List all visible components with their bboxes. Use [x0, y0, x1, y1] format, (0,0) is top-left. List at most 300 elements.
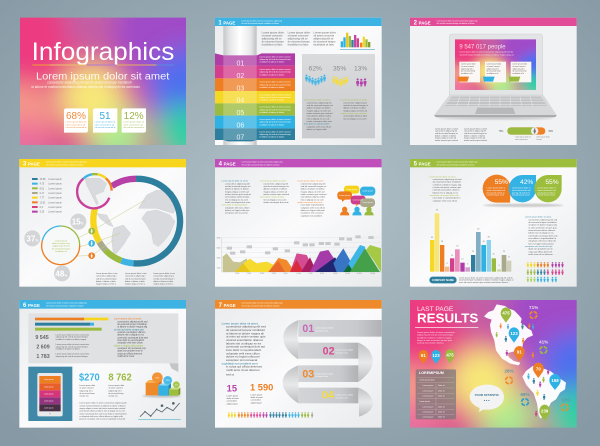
page 2 text columns: magna aliqua ut enim ad [464, 137, 485, 140]
lower text: Lorem ipsum dolor sit amet consectetur adipiscing elit [79, 402, 127, 405]
page 4 text columns: Lorem ipsum dolor sit amet, [297, 180, 324, 183]
lower text: exercitation ullamco laboris nisi ut aliquip ex ea com [79, 410, 125, 413]
legend: 10,51 [40, 202, 46, 204]
numbered ribbons: 02 [236, 73, 244, 80]
numbered ribbons: adipiscing elit sed do eiusmod temp [259, 71, 292, 74]
header: page 1: 1 PAGE [218, 20, 235, 26]
screen cards: adipiscing elit s [512, 67, 525, 70]
page 3 text columns: consectetur adipiscing e [96, 275, 117, 278]
stats text: minim veniam quis nostrud [341, 112, 367, 115]
stats text: minim veniam quis nostrud [307, 112, 333, 115]
numbered ribbons: adipiscing elit sed do eiusmod temp [259, 58, 292, 61]
data table: Lorem ipsum [419, 401, 430, 403]
header: page 2: Lorem ipsum dolor sit amet consectetur adipiscing [437, 19, 477, 22]
page 2 text columns: consectetur adipiscing elit [435, 130, 457, 133]
center text circle: incididunt ut [55, 250, 67, 253]
stat 15: consectetur [227, 400, 237, 403]
page 5 upper text: ut labore et dolore magna aliq [433, 183, 462, 186]
page 4 text columns: consectetur adipiscing elit [225, 182, 250, 185]
top right text: Lorem ipsum dolor sit amet, [114, 318, 142, 321]
results intro text: adipiscing elit sed do eiusmod tempor [417, 334, 453, 337]
big numbers: 2 609 [36, 345, 50, 351]
page 4 text columns: sed do eiusmod tempor inc [225, 185, 252, 188]
page 5 upper text: consectetur adipiscing elit sed [433, 178, 462, 181]
step captions: sit amet cons [335, 351, 348, 354]
numbered ribbons: 07 [236, 134, 244, 141]
screen cards: Lorem ipsum dolo [487, 64, 501, 66]
number captions: Lorem ipsum dolor sit amet consectetur [56, 353, 90, 356]
header: page 4: Lorem ipsum dolor sit amet consectetur adipiscing [242, 161, 282, 164]
percentage drops [483, 175, 563, 207]
mountain area chart: 8,000 [320, 273, 324, 275]
line chart [138, 402, 181, 420]
top right text: datat non proident sunt in [117, 350, 143, 353]
page 5 right text: consectetur adipiscing elit sed [528, 218, 558, 221]
page 5 right text: mollit anim id est laborum [528, 253, 553, 256]
page 2 text columns: didunt ut labore et dolore [464, 134, 485, 137]
page 5 right text: irure dolor in reprehenderit in [528, 237, 557, 240]
page 7 text: laboris nisi ut aliquip ex ea [226, 341, 261, 345]
button caption: Lorem ipsum dolor sit amet consectetur adipiscing elit sed do [459, 276, 514, 279]
results intro text: aliqua ut enim ad minim veniam quis [417, 339, 452, 342]
page 3 text columns: magna aliqua ut enim a [96, 283, 117, 286]
numbered ribbons: adipiscing elit sed do eiusmod temp [259, 133, 292, 136]
page 4 text columns: voluptate velit esse cillum [301, 206, 325, 209]
percentage drops: usmod tempor incid [537, 194, 555, 197]
phone tile: Lorem ipsum [44, 393, 54, 395]
legend pins: 123 [432, 353, 440, 358]
cover tagline: ut labore et nostrud exercitation ullamco laboris nisi ut aliquip ex ea commodo [31, 85, 140, 89]
stats text: modo consequat duis aute [307, 120, 333, 123]
screen cards: sit amet consect [487, 65, 500, 68]
percent rings: 41% [539, 339, 549, 344]
page 2 text columns: sed do eiusmod tempor inc [464, 132, 487, 135]
data table: Lorem ipsum dolor [419, 380, 435, 382]
data table: Lorem ipsum [423, 390, 434, 392]
data table: Lorem ipsum [423, 416, 434, 418]
screen cards: adipiscing elit s [461, 67, 473, 70]
data table: Lorem ipsum [423, 385, 434, 387]
progress pill: Lorem ipsum dolor [536, 137, 550, 139]
legend [32, 178, 62, 214]
map pins: 239 [541, 409, 549, 414]
progress pill: 25% [548, 131, 553, 133]
numbered ribbons: adipiscing elit sed do eiusmod temp [259, 108, 292, 111]
stat $270: $270 [79, 373, 100, 384]
header: page 7 [215, 300, 382, 309]
header: page 6: elit sed do eiusmod tempor incididunt ut labore [46, 304, 84, 307]
data table: Dolor sit [438, 395, 445, 398]
mountain area chart: 12,000 [370, 273, 375, 275]
stats text: dolore eu fugiat nulla [307, 128, 327, 131]
progress pill [499, 127, 553, 141]
page 3 text columns: Lorem ipsum dolor sit am [96, 272, 118, 275]
page 4 text columns: minim veniam quis nostrud [225, 193, 251, 196]
page 7 text: voluptate velit esse cillum [226, 351, 260, 355]
stat card 68% [64, 108, 88, 133]
page 7 text: ut labore et dolore magna ali [226, 331, 264, 335]
top text blocks: adipiscing elit se [262, 38, 282, 41]
page 7 text: nostrud exercitation ullamco [226, 338, 263, 342]
panel: last page results [373, 260, 600, 444]
percentage drops: amet consectetur adi [487, 189, 506, 192]
map pins: 70 [536, 366, 541, 371]
percentage drops: amet consectetur adi [537, 189, 556, 192]
stat 8 762: Lorem ipsum dolo [108, 384, 125, 387]
speech bubbles and people: Lorem ipsum [339, 195, 350, 197]
top text blocks: incididunt ut labo [262, 44, 283, 47]
lower text [79, 402, 127, 421]
stat card 12% [122, 108, 146, 133]
bar chart: 25 [503, 251, 506, 253]
page 4 text columns: modo consequat duis aute [225, 201, 251, 204]
stats text: nisi ut aliquip ex ea com [307, 117, 330, 120]
results title [415, 306, 478, 328]
speech bubble: • • • [484, 398, 490, 402]
stats text: voluptate velit esse cillum [307, 125, 331, 128]
gray stats panel: 62% [309, 65, 322, 72]
page 2 text columns: minim veniam quis nostrud [464, 139, 487, 142]
top text blocks: sit amet consecte [313, 35, 335, 38]
center text circle: dolor sit amet cons [52, 242, 70, 245]
step numbers: 03 [302, 369, 314, 381]
cover subtitle: Lorem ipsum dolor sit amet [36, 71, 170, 82]
stat card 51: 51 [99, 111, 111, 122]
step captions: Lorem ipsum dolor [335, 349, 353, 352]
numbered ribbons: 06 [236, 122, 244, 129]
legend: 9,25 [40, 212, 45, 214]
data table: Dolor sit [438, 415, 445, 418]
data table: Dolor sit [438, 405, 445, 408]
stats text: didunt ut labore et dolore [307, 107, 331, 110]
page 4 text columns: modo consequat duis aute [297, 201, 323, 204]
top right text: ut enim ad minim veniam quis [114, 328, 145, 331]
mountain area chart: 5,000 [283, 273, 288, 275]
screen cards: Lorem ipsum dolo [512, 64, 527, 66]
mountain area chart: 6000 [217, 248, 220, 250]
speech bubble [470, 385, 504, 412]
stats text: consectetur adipiscing elit [307, 101, 332, 104]
progress pill: 75% [499, 131, 503, 133]
people row [228, 412, 313, 418]
numbered ribbons: 04 [236, 98, 244, 105]
legend: 7,77 [40, 198, 45, 200]
page 3 text columns [96, 272, 175, 286]
percent rings: 69% [520, 392, 531, 397]
page 5 right text: commodo consequat duis aute [528, 234, 559, 237]
progress pill: sit amet [536, 138, 542, 141]
gray stats panel [302, 54, 375, 138]
percentage drops: 55% [545, 179, 559, 186]
button caption: eiusmod tempor incididunt ut labore et dolore magna aliqua ut [459, 279, 514, 282]
page 7 text: sed ut [226, 372, 234, 376]
page 3 text columns: didunt ut labore et dolo [153, 280, 173, 283]
numbered ribbons: adipiscing elit sed do eiusmod temp [259, 83, 292, 86]
header: page 4: elit sed do eiusmod tempor incididunt ut labore [242, 163, 279, 166]
step numbers: 02 [323, 345, 335, 357]
page 4 text columns: consectetur adipiscing elit [263, 182, 288, 185]
numbered ribbons: incididunt ut labore et dolore [259, 123, 285, 126]
page 4 text columns: didunt ut labore et dolore [225, 188, 250, 191]
page 3 text columns: Lorem ipsum dolor sit am [153, 272, 175, 275]
legend: Lorem ipsum [48, 178, 62, 181]
legend: 45,58 [40, 179, 46, 181]
percentage drops: piscing elit sed do ei [537, 191, 556, 194]
bar chart: 8 [446, 263, 448, 265]
stat 8 762: do eiusmod temp [108, 392, 124, 395]
company name button: COMPANY NAME [432, 278, 454, 282]
stat card 12%: elit sed do eiusmod te [123, 126, 145, 129]
gray stats panel: 35% [333, 65, 346, 72]
numbered ribbons: Lorem ipsum dolor sit amet consect [259, 68, 291, 71]
stat card 51 [93, 108, 117, 133]
step numbers [302, 323, 335, 402]
mountain area chart: 9,000 [333, 273, 338, 275]
top right text: voluptate velit esse cillum [117, 342, 143, 345]
stat card 12%: 12% [124, 111, 144, 122]
step captions: sit amet cons [315, 329, 328, 332]
stat 15: dolor sit amet [227, 397, 239, 400]
page 5 upper text: ut enim ad minim veniam quis [433, 186, 461, 189]
number captions: incididunt ut labore et dolore magna [56, 338, 87, 341]
numbered ribbons: 01 [236, 60, 244, 67]
number captions: Lorem ipsum dolor sit amet consectetur [56, 343, 90, 346]
page 7 text: ut enim ad minim veniam quis [226, 335, 266, 339]
cover tagline: consectetur adipiscing elit sed do eiusmod tempor incididunt [47, 80, 132, 84]
legend: Lorem ipsum [48, 183, 62, 186]
data table [416, 369, 456, 419]
page 3 text columns: sed do eiusmod tempor i [125, 277, 147, 280]
top right text: do eiusmod tempor incididunt [117, 323, 147, 326]
legend: 8,51 [40, 188, 45, 190]
bar chart: 14 [461, 258, 464, 260]
inset map circle [77, 174, 112, 208]
page 5 upper text: do eiusmod tempor incididunt [433, 181, 461, 184]
number captions: adipiscing elit sed do eiusmod tempor [56, 336, 88, 339]
speech bubbles and people: Lorem ipsum [353, 199, 364, 201]
map people [496, 323, 549, 417]
page 4 text columns: irure dolor in reprehenderit [222, 204, 247, 207]
stat 1 590 [250, 382, 273, 404]
bar chart: 25 [472, 251, 475, 253]
person nodes [88, 228, 95, 259]
page 5 right text [525, 216, 559, 256]
stat card 12%: amet consectetur ad [123, 123, 144, 126]
percentage drops: Lorem ipsum dolor si [537, 187, 556, 190]
top text blocks: adipiscing elit se [313, 38, 334, 41]
data table: Dolor sit [438, 411, 445, 414]
numbered ribbons: 03 [236, 85, 244, 92]
page 7 text: excepteur sint occaecat [226, 358, 258, 362]
numbered ribbons: Lorem ipsum dolor sit amet consect [259, 130, 291, 133]
map pins: 91 [517, 350, 522, 355]
stat 15: adipiscing el [227, 403, 238, 405]
progress bars [35, 318, 108, 331]
page 7 text: cupidatat non proident sunt [222, 361, 258, 365]
stats text: consectetur adipiscing el [343, 101, 367, 104]
top text blocks: Lorem ipsum dolor [288, 32, 310, 35]
screen cards: incididunt ut la [487, 72, 499, 75]
bar chart: 32 [456, 246, 458, 248]
header: page 6: Lorem ipsum dolor sit amet consectetur adipiscing [46, 302, 87, 305]
header: page 6 [19, 300, 186, 309]
top right text: commodo consequat duis aute [117, 336, 149, 339]
screen cards: do eiusmod temp [487, 70, 501, 73]
legend pins: 91 [421, 353, 426, 358]
top text blocks: do eiusmod tempo [288, 41, 310, 44]
bar chart: 62 [477, 228, 479, 230]
mountain area chart: 11,000 [357, 273, 362, 275]
header: page 1: elit sed do eiusmod tempor incididunt ut labore [241, 22, 279, 25]
top text blocks: do eiusmod tempo [262, 41, 284, 44]
header: page 2 [410, 18, 577, 26]
stats text: sed do eiusmod tempor inci [307, 104, 334, 107]
percentage drops: amet consectetur adi [512, 189, 531, 192]
header: page 5 [410, 159, 577, 168]
stat 8 762: sed do eiu [108, 396, 118, 398]
stat card 51: elit sed do eiusmod te [95, 126, 116, 129]
page 4 text columns: cupidatat non proident [301, 214, 322, 217]
percent rings: 71% [529, 305, 539, 310]
numbered ribbons: adipiscing elit sed do eiusmod temp [259, 121, 292, 124]
percentage drops: piscing elit sed do ei [487, 191, 505, 194]
page 3 text columns: sed do eiusmod tempor i [153, 277, 175, 280]
top right text: mollit anim id est [117, 355, 134, 358]
people rows [527, 262, 564, 282]
stat $270: do eiusmod temp [79, 392, 95, 395]
page 7 text: irure dolor in reprehenderit [226, 348, 261, 352]
lower text: pariatur excepteur sint occaecat cupidatat non proid [79, 418, 125, 421]
legend: Lorem ipsum [48, 192, 62, 195]
top text blocks: Lorem ipsum dolor [262, 32, 284, 35]
phone tile [28, 367, 72, 421]
page 4 text columns: magna aliqua ut enim ad [225, 190, 249, 193]
3d boxes: 10% [155, 377, 160, 379]
page 5 upper text: Lorem ipsum dolor sit amet, [429, 175, 456, 178]
stat 8 762: adipiscing elit s [108, 389, 122, 392]
page 5 upper text: irure dolor in reprehenderit in [433, 197, 461, 200]
header: page 6: 6 PAGE [23, 303, 40, 309]
data table: Dolor sit [438, 389, 445, 392]
mountain area chart: 3,000 [260, 273, 264, 275]
header: page 5: Lorem ipsum dolor sit amet consectetur adipiscing [437, 161, 477, 164]
stat card 51: Lorem ipsum dolor sit [95, 121, 116, 124]
numbered ribbons: incididunt ut labore et dolore [259, 111, 285, 114]
numbered ribbons: 05 [236, 110, 244, 117]
stat 1 590: dolor sit amet [251, 396, 263, 399]
top right text [114, 318, 149, 358]
number captions: adipiscing elit sed do eiusmod tempor [56, 345, 88, 348]
bar chart: 17 [508, 256, 510, 258]
panel: page 3 [19, 159, 186, 287]
percentage drops: piscing elit sed do ei [512, 191, 530, 194]
header: page 1: Lorem ipsum dolor sit amet consectetur adipiscing [241, 19, 282, 22]
legend: 6,17 [40, 193, 45, 195]
stat card 12%: Lorem ipsum dolor sit [123, 121, 144, 124]
screen cards: sit amet consect [512, 65, 526, 68]
gray stat circles [24, 214, 86, 281]
header: page 5: elit sed do eiusmod tempor incididunt ut labore [437, 163, 474, 166]
header: page 3: 3 PAGE [23, 162, 40, 168]
stats text: magna aliqua ut enim ad [343, 109, 368, 112]
stat 8 762: sit amet consect [108, 387, 123, 390]
header: page 4 [215, 159, 382, 168]
legend: Lorem ipsum [48, 211, 62, 214]
stats text: sed do eiusmod tempor in [343, 104, 369, 107]
cover title: Infographics [32, 39, 174, 66]
numbered ribbons: incididunt ut labore et dolore [259, 136, 285, 139]
screen cards: incididunt ut la [512, 72, 525, 75]
numbered ribbons: Lorem ipsum dolor sit amet consect [259, 106, 291, 109]
top text blocks: do eiusmod tempo [313, 41, 336, 44]
page 7 text: commodo consequat duis aut [226, 345, 265, 349]
center text circle: Lorem ipsum [55, 239, 67, 242]
numbered ribbons: incididunt ut labore et dolore [259, 73, 285, 76]
page 4 text columns: excepteur sint occaecat [225, 212, 248, 215]
mountain area chart: 9000 [217, 238, 220, 240]
people: 13% [356, 78, 367, 87]
big numbers: 1 783 [36, 354, 50, 360]
mountain area chart: 10,000 [345, 273, 350, 275]
number captions [56, 333, 90, 358]
numbered ribbons [215, 53, 295, 141]
page 4 text columns: consectetur adipiscing elit [301, 182, 326, 185]
screen cards: Lorem ipsum dolo [461, 64, 476, 66]
speech bubble: YOUR STATISTIC [474, 393, 500, 397]
page 4 text columns: nisi ut aliquip ex ea com [225, 198, 248, 201]
top text blocks: adipiscing elit se [288, 38, 308, 41]
page 7 text: do eiusmod tempor incididunt [226, 328, 265, 332]
screen cards: sit amet consect [461, 65, 475, 68]
top text blocks: sit amet consecte [262, 35, 283, 38]
speech bubbles and people: Lorem ipsum [346, 189, 357, 191]
number captions: incididunt ut labore et dolore [56, 348, 80, 351]
big numbers: 9 545 [35, 335, 49, 341]
company name button [429, 277, 457, 283]
mountain area chart: 2,000 [247, 273, 251, 275]
percent rings: 13% [561, 397, 571, 402]
gray stat circles: 15% [72, 218, 84, 227]
numbered ribbons: Lorem ipsum dolor sit amet consect [259, 93, 291, 96]
page 5 right text: Lorem ipsum dolor sit amet, [525, 216, 552, 219]
people: 35% [332, 76, 348, 87]
map pins: 123 [510, 331, 518, 336]
bar chart: 4 [498, 265, 500, 267]
progress pill: amet consectetur [515, 138, 528, 141]
page 4 text columns: exercitation ullamco labor [260, 196, 285, 199]
numbered ribbons: Lorem ipsum dolor sit amet consect [259, 81, 291, 84]
center text circle: adipiscing elit sed [52, 245, 70, 248]
stat 1 590: consectetur [251, 399, 261, 402]
page 5 upper text [429, 175, 462, 202]
stat card 68%: Lorem ipsum dolor sit [66, 121, 87, 124]
page 4 text columns: Lorem ipsum dolor sit amet, [260, 180, 287, 183]
speech bubbles and people: Lorem ipsum [362, 202, 373, 204]
header: page 2: 2 PAGE [414, 20, 431, 26]
page 5 right text: culpa qui officia deserunt [528, 250, 553, 253]
page 2 text columns: Lorem ipsum dolor sit amet [464, 127, 488, 130]
stat card 68%: 68% [66, 111, 86, 122]
page 2 text columns: magna aliqua ut enim ad [435, 137, 456, 140]
panel: page 4 [215, 159, 382, 287]
top right text: ut labore et dolore magna aliq [117, 326, 148, 329]
bar chart: 40 [483, 241, 486, 243]
stat 15: Lorem ipsum [227, 394, 238, 397]
page 3 text columns: sed do eiusmod tempor i [96, 277, 118, 280]
people: 62% [305, 74, 326, 86]
page 5 right text: ut enim ad minim veniam quis [528, 226, 557, 229]
bar chart: 95 [436, 210, 439, 212]
